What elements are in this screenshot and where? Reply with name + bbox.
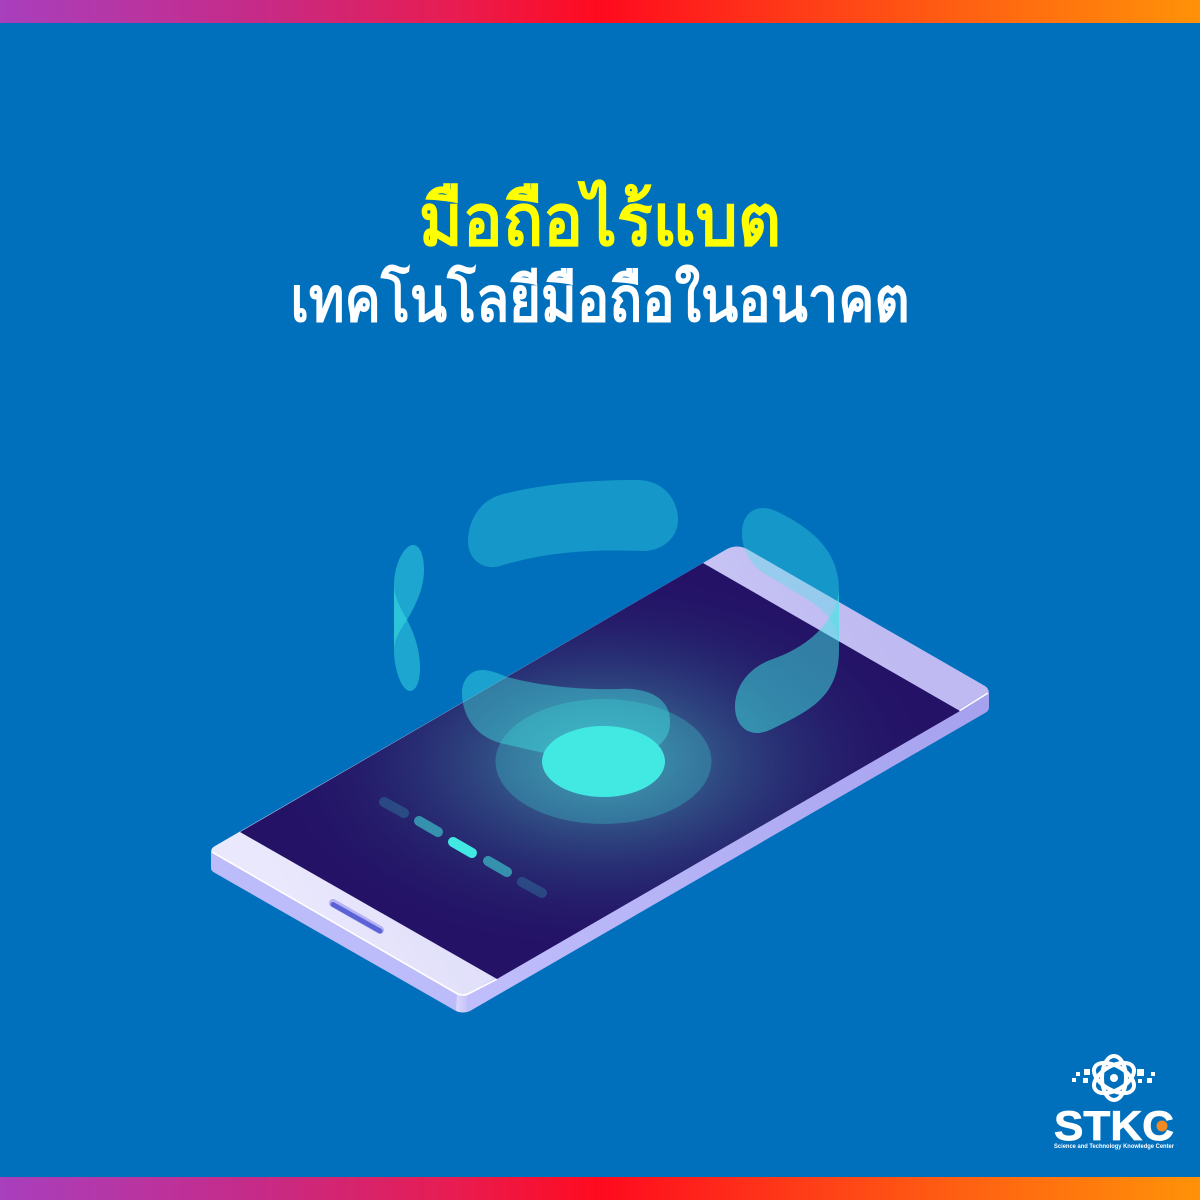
phone left side	[211, 850, 470, 1012]
phone right side	[463, 690, 989, 1011]
floating wave: right	[735, 508, 839, 733]
illustration: smartphone	[211, 546, 989, 1012]
speaker slot	[333, 903, 380, 931]
logo pixel dots	[1072, 1069, 1155, 1083]
logo tagline: Science and Technology Knowledge Center	[1054, 1144, 1175, 1150]
title: yellow heading: มือถือไร้แบต	[419, 181, 781, 261]
subtitle: white heading: เทคโนโลยีมือถือในอนาคต	[290, 266, 910, 335]
bottom gradient bar	[0, 1177, 1200, 1200]
dash indicators	[384, 802, 542, 893]
logo orange dot	[1156, 1120, 1168, 1132]
phone top face	[212, 546, 988, 994]
floating wave: lower	[462, 670, 670, 760]
bottom edge highlight	[212, 693, 988, 995]
phone corner highlight	[456, 994, 470, 1012]
screen	[240, 563, 960, 979]
logo atom icon	[1089, 1056, 1139, 1100]
touch ripple outer	[496, 699, 712, 824]
logo: STKC	[1054, 1056, 1175, 1150]
touch point	[542, 726, 665, 797]
screen glow	[340, 614, 860, 910]
floating wave: upper	[468, 480, 678, 567]
top gradient bar	[0, 0, 1200, 23]
logo wordmark: STKC	[1054, 1102, 1174, 1149]
floating wave: left	[394, 545, 424, 691]
